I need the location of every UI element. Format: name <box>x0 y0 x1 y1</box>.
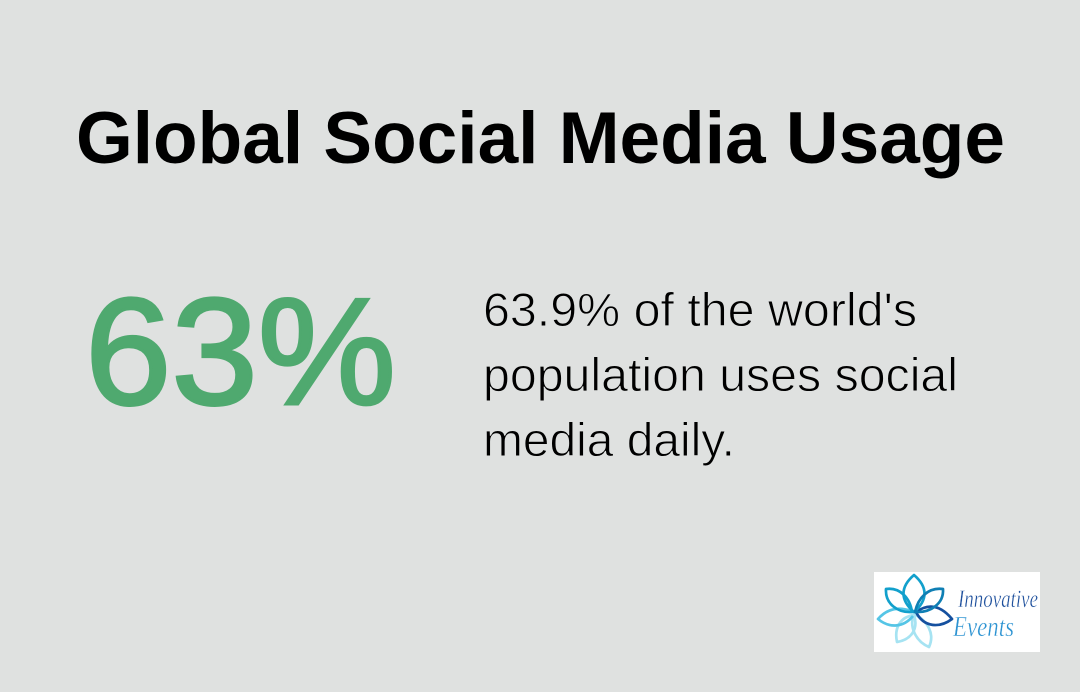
description text: media daily. <box>483 413 735 466</box>
description text: population uses social <box>483 348 958 401</box>
logo: Innovative Events <box>874 572 1040 652</box>
title: Global Social Media Usage <box>76 98 1005 179</box>
logo wordmark: Innovative: Innovative <box>957 586 1038 613</box>
description text: 63.9% of the world's <box>483 283 917 336</box>
big statistic: 63%: 63% <box>85 267 396 437</box>
description text <box>483 283 958 466</box>
logo wordmark: Events: Events <box>952 612 1014 643</box>
icon: lotus flower <box>878 575 952 647</box>
